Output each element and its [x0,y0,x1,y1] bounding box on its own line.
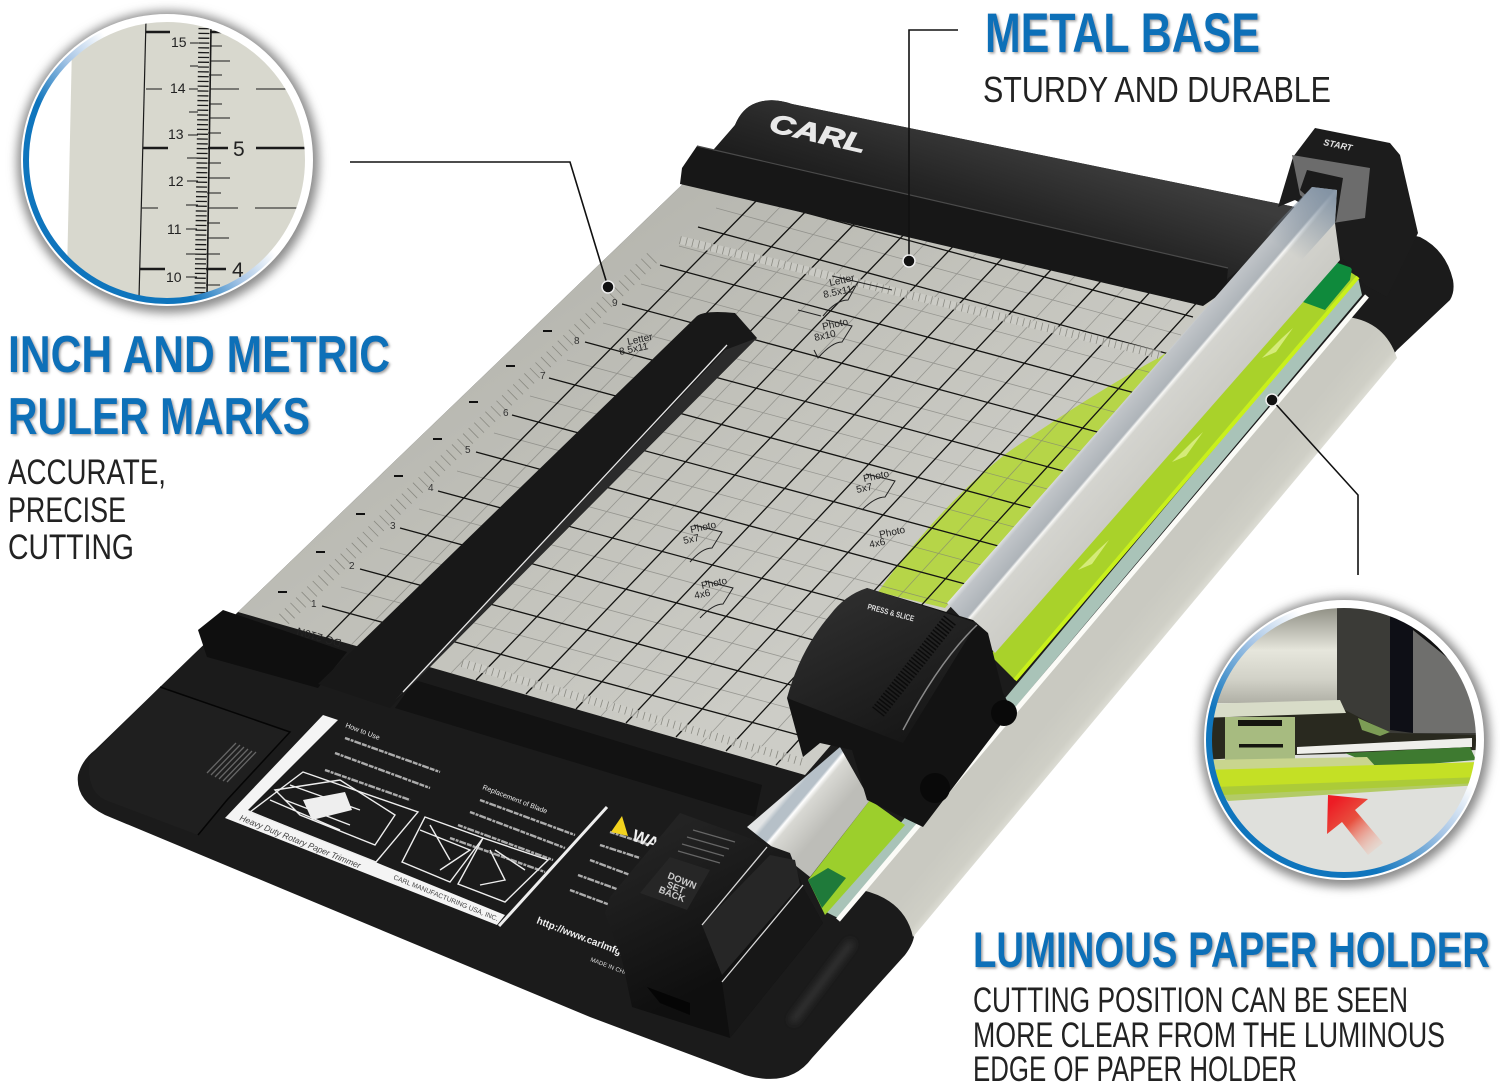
left clamp bar [198,610,347,688]
inch 4: 4 [428,483,434,494]
diagram highlight [303,792,352,820]
cutter head [787,588,1017,827]
white rail edge [838,296,1367,920]
leader dot [602,281,614,293]
lime edge [1205,762,1480,795]
front handle [605,813,823,1038]
under housing green [1358,718,1390,736]
lime lower shade [1215,777,1480,801]
black fence arm [318,312,757,708]
handle highlight lines [702,847,803,982]
press and slice label: PRESS & SLICE [866,602,916,623]
inset shadow [17,11,319,313]
leader dot [903,255,915,267]
clamp bar top highlight [697,146,1228,268]
half grid lines [341,201,1187,758]
inch 5: 5 [465,445,471,456]
start label: START [1323,137,1355,153]
gray side rail [862,317,1397,937]
inset blue ring [26,19,308,301]
head top face [787,588,977,743]
start end block [1278,128,1418,297]
description line two: PRECISE [8,491,126,530]
heading: metal base: METAL BASE [985,1,1260,64]
inch 8: 8 [574,336,580,347]
inset white disc [1204,600,1484,880]
white sheet [1297,738,1472,754]
text: metal base description: STURDY AND DURABLE [983,69,1331,110]
label product name: Heavy Duty Rotary Paper Trimmer [238,813,363,871]
green clip [1225,717,1295,760]
fence flange [395,338,757,700]
inset holder photo [1212,608,1476,872]
inset blue ring [1209,605,1479,875]
rail shadow inside slot [1262,187,1337,262]
inch 9: 9 [612,298,618,309]
text: ruler description [8,453,166,567]
inch number 4: 4 [232,259,244,282]
holder tab three [1078,540,1109,570]
upper knob [991,700,1017,726]
lime holder strip [990,262,1358,680]
leader: paper holder [1266,394,1358,575]
photo 5x7 mark: Photo [862,469,891,485]
circle inset: ruler marks [17,0,330,320]
photo size: 8x10 [813,329,837,344]
circle inset: luminous holder [1200,595,1490,887]
lower 5x7 mark: Photo [689,520,718,536]
black channel [1390,616,1413,733]
lower 4x6 mark: Photo [700,576,729,592]
ruler strips [283,240,1160,763]
left margin inch ticks [278,331,552,592]
red arrow [1327,795,1383,855]
down word: DOWN [666,871,698,892]
made in label: MADE IN CHINA [589,957,634,979]
ruler number 14: 14 [170,80,186,96]
dark green tab [1303,262,1352,310]
inset ruler photo [68,22,305,298]
photo 5x7 shield [862,474,895,510]
back word: BACK [657,885,687,905]
lower 4x6 size: 4x6 [693,588,712,602]
label maker name: CARL MANUFACTURING USA, INC. [392,874,499,923]
grid lines [322,195,1211,765]
holder tab one [1262,328,1293,358]
letter size: 8.5x11 [822,284,854,301]
ruler number 10: 10 [166,269,182,285]
silver rail lower section [747,747,870,877]
letter mark left: Letter [626,332,654,348]
ruler number 12: 12 [168,173,184,189]
lower 4x6 shield [700,581,733,618]
inch 1: 1 [311,599,317,610]
photo 4x6 size: 4x6 [868,537,887,551]
base corner highlight [792,942,852,1022]
top base panel [690,100,1300,300]
inch 6: 6 [503,408,509,419]
blue gray holder edge [826,277,1362,918]
bright lime edge [1015,277,1358,680]
compartment seam [160,687,290,835]
inset white disc [21,14,313,306]
instruction label [225,715,662,979]
replacement of blade heading: Replacement of Blade [481,784,548,816]
warning triangle [611,816,628,836]
ruler number 13: 13 [168,126,184,142]
ruler plate [238,180,1225,775]
inch 7: 7 [540,371,546,382]
luminous green paper holder sheet [878,350,1170,608]
photo mark: Photo [821,317,850,333]
handle slot [647,987,690,1015]
lower knob [920,773,950,803]
clip slot lower [1239,744,1283,748]
photo 5x7 size: 5x7 [855,482,874,496]
inch 2: 2 [349,561,355,572]
inch number 5: 5 [233,138,245,161]
letter size left: 8.5x11 [618,341,650,358]
brushed metal [1217,608,1337,703]
photo 4x6 mark: Photo [878,525,907,541]
top clamp bar [680,146,1228,306]
leader dot [1266,394,1278,406]
instruction text lines [325,738,650,905]
lower clamp bar [395,680,762,817]
ruler number 11: 11 [167,221,182,237]
head side highlight [903,625,977,730]
holder tab two [1172,432,1203,462]
set word: SET [665,880,686,897]
website text: http://www.carlmfg.com [535,916,644,966]
leader: ruler marks [350,162,614,293]
left compartment [89,687,290,835]
instruction diagrams [250,772,548,902]
how to use title: How to Use [344,722,381,742]
inset shadow [1200,597,1490,887]
silver blade rail [947,187,1340,653]
start slot [1300,170,1343,222]
vent icon [207,743,256,782]
heading line two: RULER MARKS [8,388,310,446]
shelf rim [1214,700,1346,718]
text: holder description [973,981,1445,1084]
handle button [640,857,710,910]
head grip [878,620,950,712]
lower 5x7 shield [690,525,722,562]
letter shield [798,276,892,316]
lower 5x7 size: 5x7 [682,533,701,547]
photo shield [814,320,852,358]
brand logo: CARL [767,108,869,159]
button label [657,871,698,905]
black corner [1413,628,1448,658]
fence white edge [403,345,727,692]
lower dark green tab [808,868,846,908]
white divider [499,807,607,926]
clip slot upper [1238,720,1282,726]
description line three: CUTTING [8,528,134,567]
handle front face [722,887,823,1038]
dark housing [1337,608,1476,735]
paper size marks [618,273,907,618]
dark gap [1200,710,1480,760]
inch numbers [311,298,618,610]
handle panel [702,855,800,975]
handle ridges [678,830,735,863]
letter mark: Letter [828,273,856,289]
dark green strip [1345,747,1475,766]
description line one: ACCURATE, [8,453,166,492]
leader: metal base [903,30,958,267]
model number: DC-210N [295,624,343,649]
inch 3: 3 [390,521,396,532]
heading: inch and metric [8,326,390,446]
lime holder lower strip [808,800,905,915]
pale green strip [1214,757,1374,770]
heading line one: INCH AND METRIC [8,326,390,384]
gray housing face [1413,630,1480,733]
ruler number 15: 15 [171,34,187,50]
warning word: WA [630,826,662,854]
start slot frame [1292,155,1370,223]
